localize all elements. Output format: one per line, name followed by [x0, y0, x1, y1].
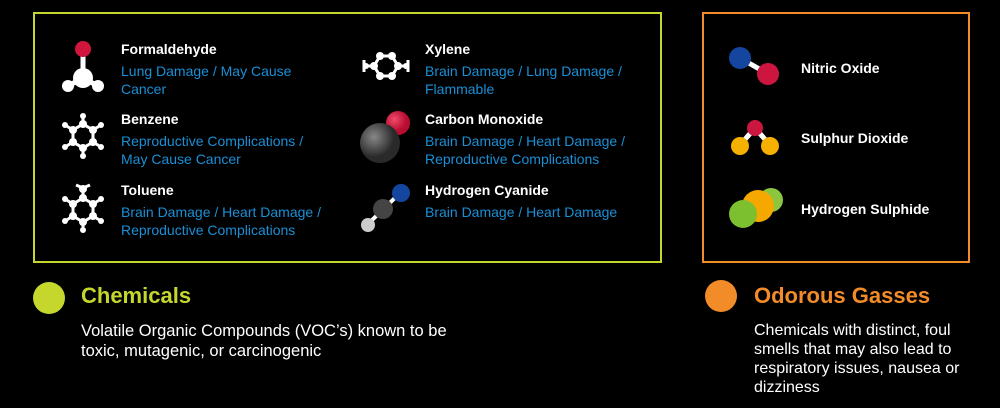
- text: formaldehyde: Cancer: [121, 81, 166, 97]
- text: sulphur dioxide: Sulphur Dioxide: [801, 130, 908, 146]
- icon: nitric oxide: [729, 47, 779, 85]
- text: odorous description: respiratory issues, nausea or: [754, 360, 959, 377]
- text: chemicals description: [81, 322, 447, 360]
- icon: odorous bullet: [705, 280, 737, 312]
- text: hydrogen cyanide: [425, 182, 617, 220]
- icon: sulphur dioxide: [731, 120, 779, 155]
- text: carbon monoxide: Reproductive Complications: [425, 151, 599, 167]
- panel: chemicals box: [33, 12, 662, 263]
- text: benzene: May Cause Cancer: [121, 151, 241, 167]
- icon: chemicals bullet: [33, 282, 65, 314]
- icon: carbon monoxide: [360, 111, 410, 163]
- text: hydrogen cyanide: Brain Damage / Heart Damage: [425, 204, 617, 220]
- heading: chemicals: Chemicals: [81, 283, 191, 308]
- text: carbon monoxide: Brain Damage / Heart Damage /: [425, 133, 625, 149]
- icon: xylene: [362, 52, 410, 80]
- text: benzene: [121, 111, 304, 167]
- text: xylene: Flammable: [425, 81, 494, 97]
- text: odorous description: [754, 322, 960, 396]
- text: formaldehyde: Formaldehyde: [121, 41, 217, 57]
- text: chemicals description: toxic, mutagenic, or carcinogenic: [81, 342, 321, 360]
- text: odorous description: smells that may also lead to: [754, 341, 951, 358]
- text: toluene: Brain Damage / Heart Damage /: [121, 204, 321, 220]
- text: hydrogen sulphide: Hydrogen Sulphide: [801, 201, 929, 217]
- text: toluene: [121, 182, 321, 238]
- text: formaldehyde: Lung Damage / May Cause: [121, 63, 291, 79]
- heading: odorous gasses: Odorous Gasses: [754, 283, 930, 308]
- text: odorous description: Chemicals with distinct, foul: [754, 322, 951, 339]
- text: hydrogen cyanide: Hydrogen Cyanide: [425, 182, 549, 198]
- panel: odorous box: [702, 12, 970, 263]
- text: carbon monoxide: Carbon Monoxide: [425, 111, 543, 127]
- icon: toluene: [62, 184, 104, 233]
- text: nitric oxide: Nitric Oxide: [801, 60, 880, 76]
- text: xylene: Brain Damage / Lung Damage /: [425, 63, 622, 79]
- text: toluene: Toluene: [121, 182, 174, 198]
- text: chemicals description: Volatile Organic Compounds (VOC’s) known to be: [81, 322, 447, 340]
- text: benzene: Reproductive Complications /: [121, 133, 303, 149]
- text: carbon monoxide: [425, 111, 625, 167]
- text: toluene: Reproductive Complications: [121, 222, 295, 238]
- text: xylene: Xylene: [425, 41, 470, 57]
- text: odorous description: dizziness: [754, 379, 820, 396]
- icon: hydrogen cyanide: [361, 184, 410, 232]
- text: benzene: Benzene: [121, 111, 179, 127]
- text: formaldehyde: [121, 41, 291, 97]
- icon: formaldehyde: [62, 41, 104, 92]
- text: xylene: [425, 41, 622, 97]
- icon: hydrogen sulphide: [729, 188, 783, 228]
- icon: benzene: [62, 113, 104, 159]
